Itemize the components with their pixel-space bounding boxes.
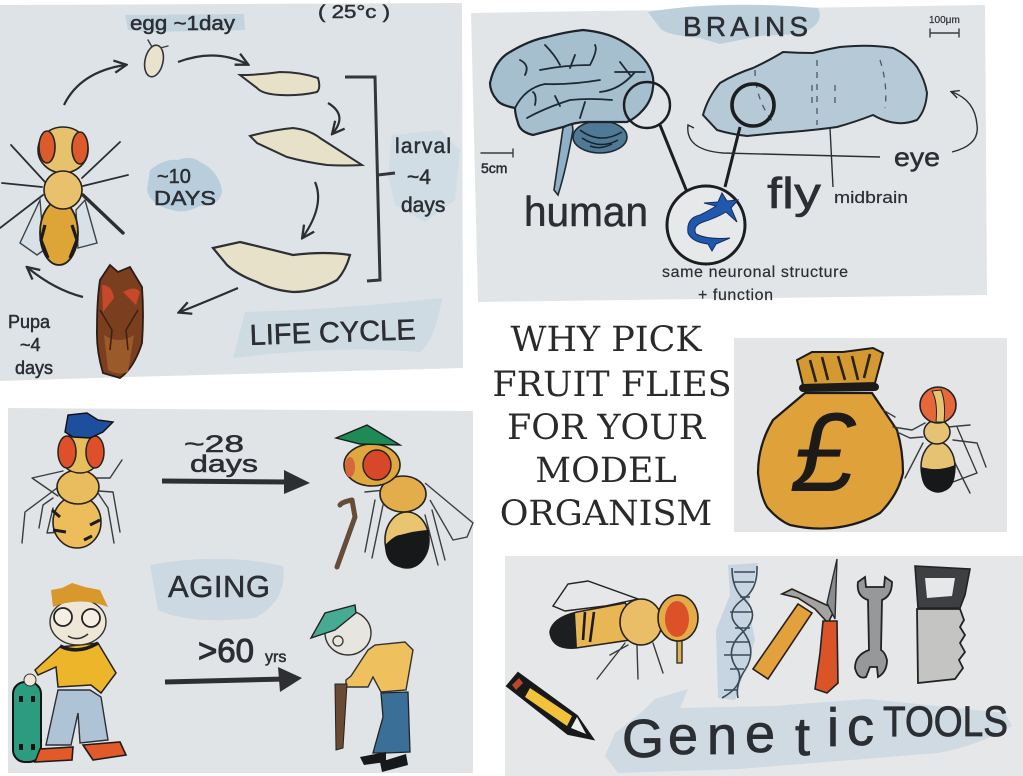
icon: pencil — [507, 673, 593, 739]
label: over 60 yrs: >60 — [198, 632, 254, 669]
arrows: life cycle — [28, 55, 339, 312]
label: human: human — [524, 188, 648, 235]
label: pupa: Pupa — [8, 312, 51, 332]
icon: spanner — [855, 577, 892, 678]
paint wash: aging — [150, 559, 284, 620]
caption: same neuronal structure: same neuronal structure — [662, 264, 848, 281]
panel: money — [734, 338, 1007, 532]
title: MODEL — [535, 451, 677, 491]
pupa — [97, 265, 143, 378]
icon: fly — [550, 581, 698, 679]
caption: same neuronal structure: + function — [698, 287, 773, 304]
larva 3 — [213, 242, 350, 292]
label: larval duration: larval — [395, 135, 451, 158]
label: larval duration: days — [401, 194, 445, 217]
label: pupa: days — [15, 358, 53, 378]
icon: adult fly — [0, 127, 128, 265]
icon: hammer — [753, 589, 835, 679]
paint wash: tools — [605, 689, 1012, 773]
boy with skateboard — [13, 583, 126, 762]
heading: genetic: Genetic — [622, 697, 874, 769]
label: eye: eye — [894, 142, 940, 172]
icon: neuron — [688, 193, 738, 251]
label: 28 days: days — [190, 451, 258, 478]
heading: aging: AGING — [168, 569, 270, 604]
panel: genetic tools — [505, 556, 1023, 776]
paint wash: larval — [388, 130, 460, 222]
larva 2 — [250, 128, 362, 166]
bracket: larval — [345, 77, 395, 281]
scale: 5 cm: 5cm — [481, 160, 507, 176]
label: pupa: ~4 — [20, 335, 41, 355]
icon: money bag: £ — [791, 390, 857, 515]
title: WHY PICK — [510, 320, 702, 360]
label: 10 days: DAYS — [154, 188, 216, 210]
label: 28 days: ~28 — [184, 431, 244, 458]
panel: brains — [471, 5, 987, 304]
scale: 100 µm — [929, 15, 960, 37]
label: over 60 yrs: yrs — [265, 649, 286, 666]
panel: life cycle — [0, 2, 463, 381]
arrow: 28 days — [162, 470, 310, 494]
scale: 100 µm: 100μm — [929, 15, 960, 26]
lens circles and connectors — [624, 82, 774, 264]
icon: saw — [915, 566, 970, 683]
label: midbrain: midbrain — [834, 188, 908, 207]
label: egg: egg ~1day — [130, 13, 235, 35]
heading: brains: BRAINS — [683, 11, 808, 42]
scale: 5 cm — [481, 149, 513, 176]
heading: life cycle: LIFE CYCLE — [249, 314, 416, 352]
label: temperature: ( 25°c ) — [318, 2, 390, 22]
icon: money bag — [758, 348, 903, 529]
icon: screwdriver — [815, 559, 838, 693]
label: over 60 yrs — [198, 632, 286, 669]
title: ORGANISM — [500, 494, 712, 534]
title: FOR YOUR — [507, 408, 707, 448]
eye annotation — [688, 92, 977, 187]
panel: aging — [8, 408, 473, 773]
icon: DNA — [716, 563, 758, 700]
larva 1 — [240, 72, 319, 95]
icon: fly with money — [883, 387, 986, 493]
paint wash: brains — [648, 5, 820, 44]
label: larval duration: ~4 — [407, 166, 431, 189]
fly brain — [703, 46, 927, 136]
egg — [142, 40, 168, 79]
human brain — [490, 30, 653, 195]
title: FRUIT FLIES — [492, 365, 732, 405]
label: fly: fly — [767, 169, 821, 218]
paint wash: egg label — [125, 14, 245, 32]
arrow: 60 yrs — [165, 667, 302, 692]
label: 10 days: ~10 — [157, 166, 191, 188]
young fly with cap — [22, 413, 122, 548]
paint wash: 10 days — [147, 158, 222, 211]
old fly — [336, 425, 473, 568]
paint wash: life cycle — [233, 298, 442, 358]
old man — [311, 605, 413, 772]
